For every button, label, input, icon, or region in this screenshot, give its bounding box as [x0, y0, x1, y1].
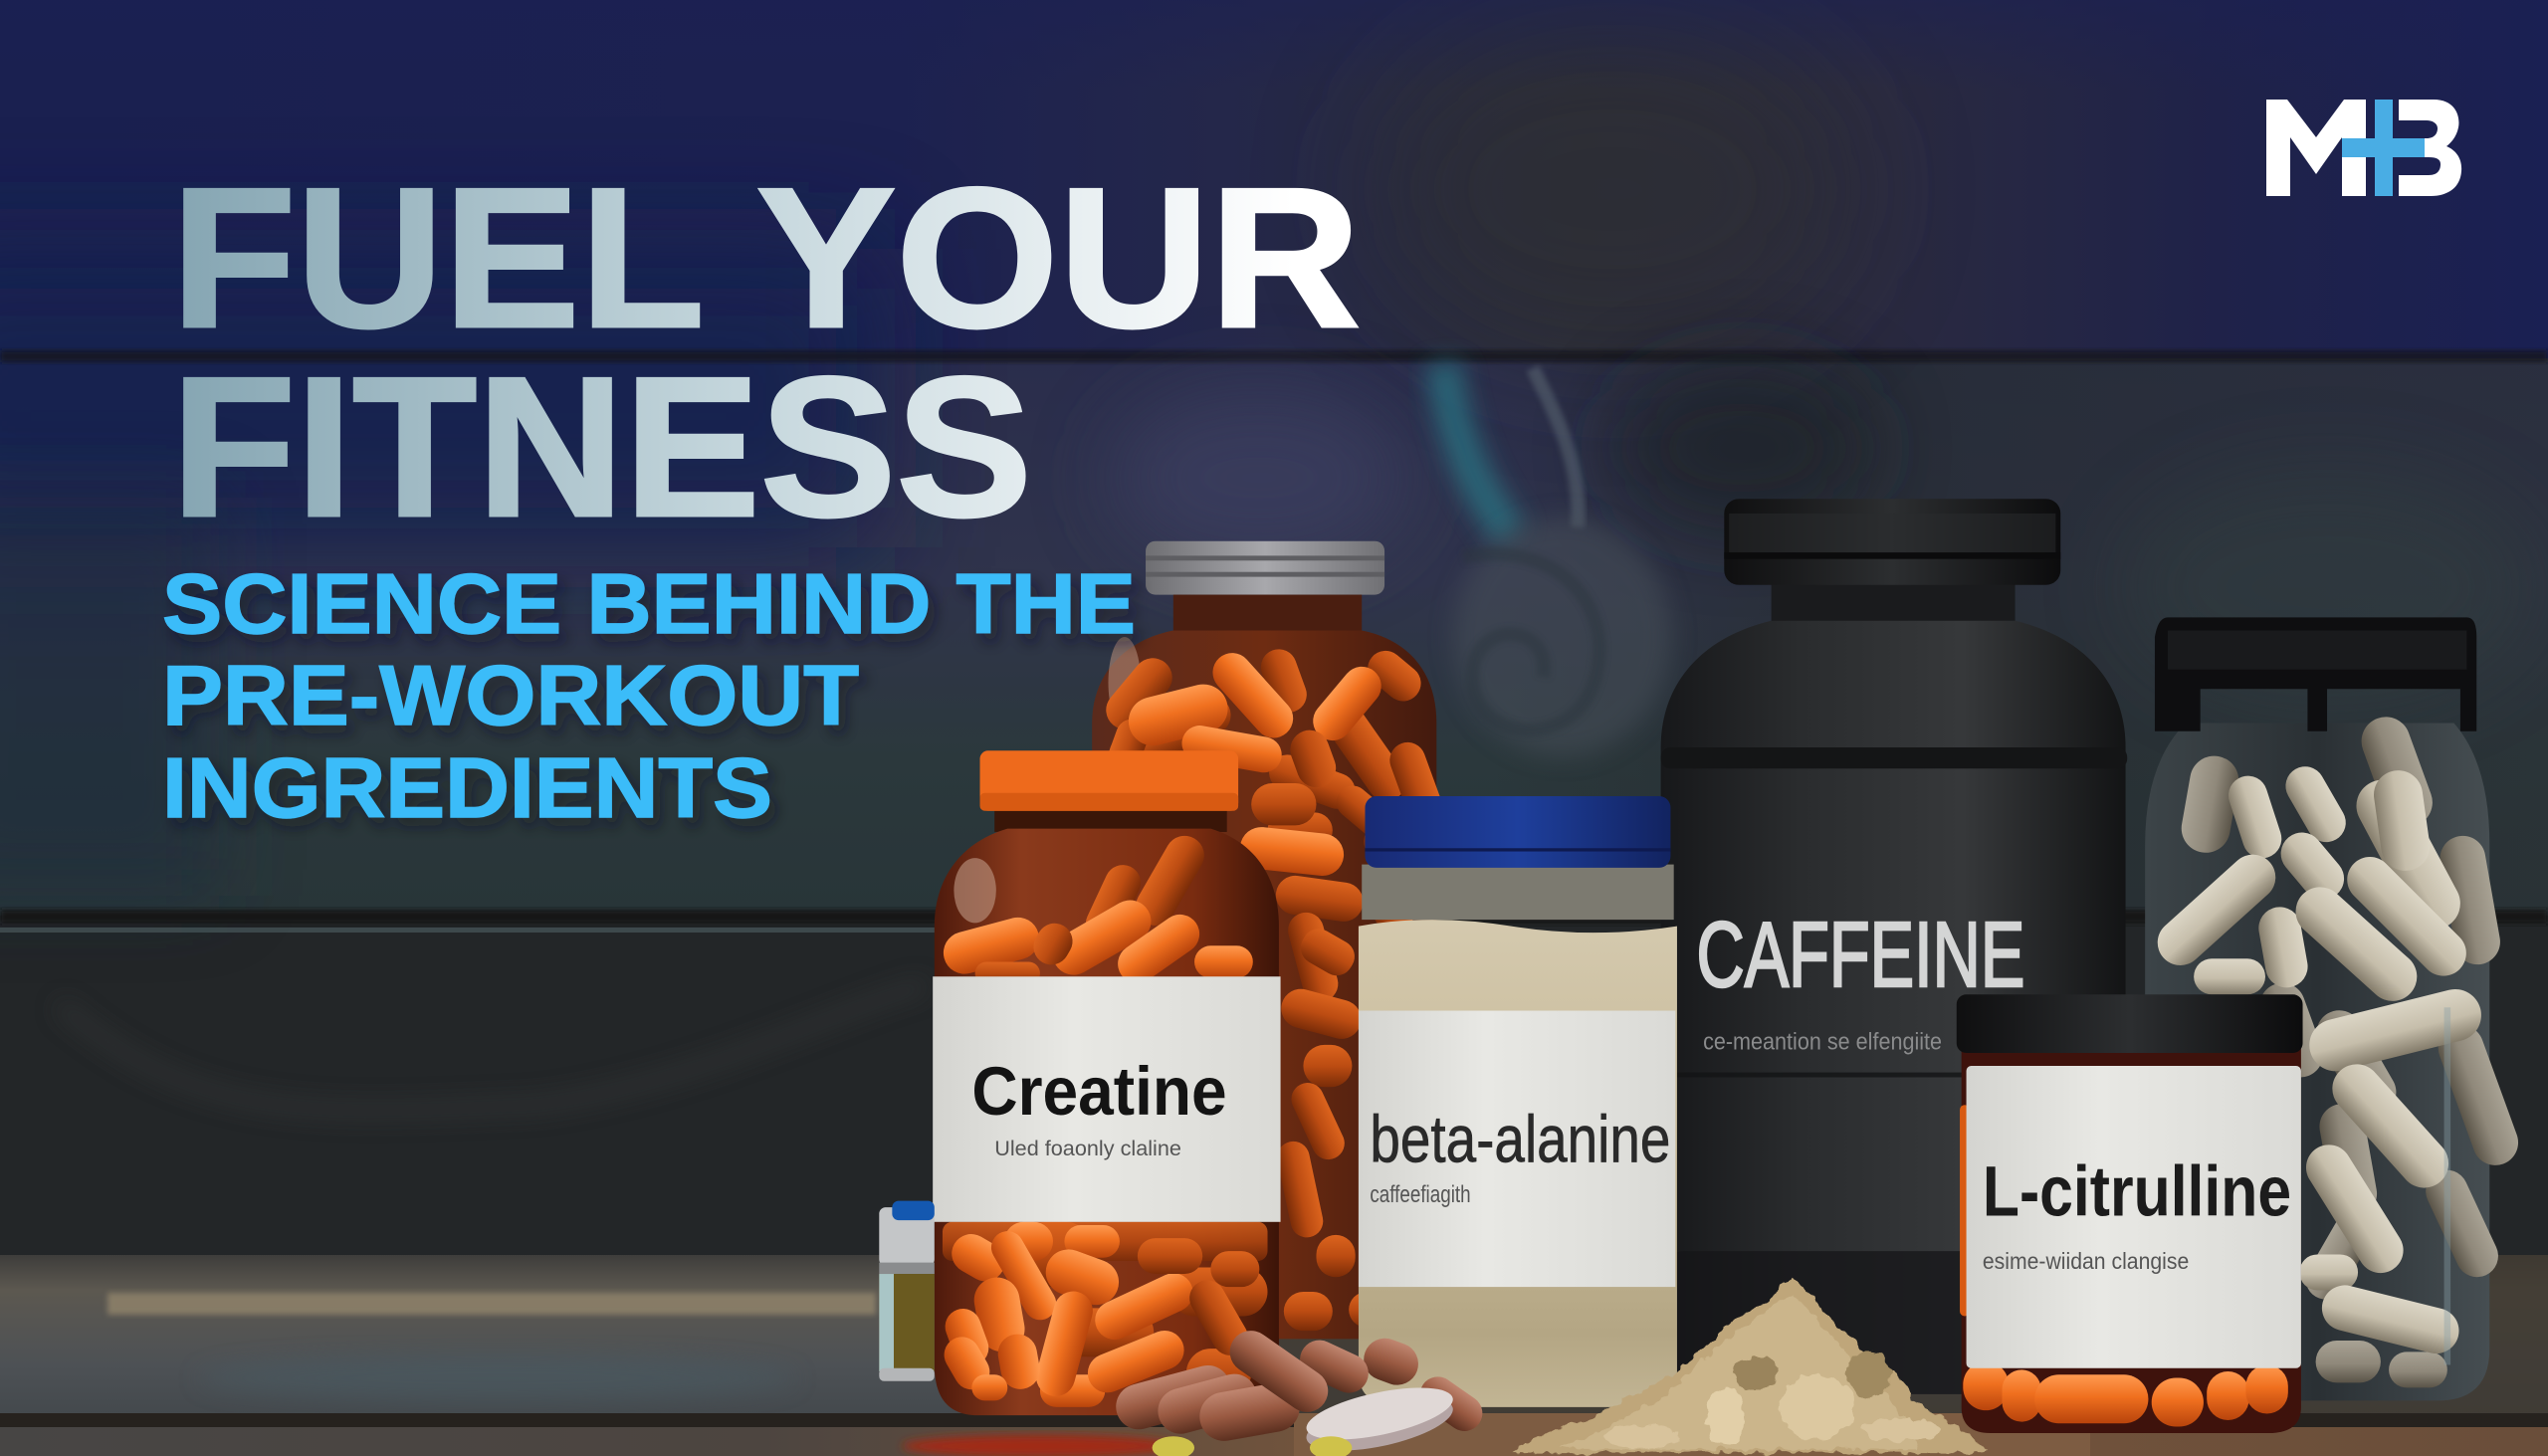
- subtitle: [162, 557, 1136, 836]
- jar highlight: [2444, 1007, 2450, 1364]
- capsules inside creatine bottle bottom: [938, 1222, 1268, 1407]
- red spice: [902, 1435, 1178, 1456]
- L-citrulline label: [1967, 1066, 2301, 1368]
- powder pile: [1511, 1277, 1989, 1453]
- beta-alanine text: beta-alanine: [1370, 1102, 1670, 1176]
- title: FUEL: [171, 147, 705, 369]
- beta-alanine label: [1359, 1011, 1675, 1287]
- title: YOUR: [756, 147, 1361, 369]
- creatine label: [933, 976, 1281, 1222]
- caffeine sub text: ce-meantion se elfengiite: [1703, 1029, 1942, 1056]
- bottle: caffeine black tub: [1661, 499, 2127, 1394]
- creatine text: Creatine: [971, 1053, 1227, 1130]
- cream capsules: [2148, 710, 2524, 1387]
- title: FITNESS: [171, 336, 1032, 558]
- logo: M+B: [2266, 100, 2461, 196]
- jar black lid: [1957, 994, 2303, 1053]
- subtitle: INGREDIENTS: [162, 741, 772, 836]
- capsules at jar bottom: [1963, 1361, 2288, 1427]
- subtitle: SCIENCE BEHIND THE: [162, 557, 1136, 652]
- product photo group (bottles, pills, powder): [879, 499, 2524, 1456]
- beta-alanine sub text: caffeefiagith: [1370, 1181, 1471, 1208]
- capsules inside creatine bottle top: [939, 829, 1253, 991]
- creatine orange cap: [980, 750, 1238, 811]
- L-citrulline text: L-citrulline: [1983, 1151, 2291, 1231]
- bottle: white capsule jar: [2145, 617, 2524, 1400]
- caffeine label text: CAFFEINE: [1697, 903, 2024, 1006]
- loose brown capsules and tablets: [1111, 1323, 1489, 1456]
- bottle: L-citrulline jar: [1957, 994, 2303, 1433]
- bottle: creatine amber bottle: [933, 750, 1281, 1415]
- L-citrulline sub text: esime-wiidan clangise: [1983, 1248, 2189, 1274]
- small tin: [879, 1201, 935, 1381]
- yellow pills: [1153, 1436, 1194, 1456]
- wooden table: [0, 1255, 2548, 1456]
- bottle: beta-alanine jar: [1359, 796, 1677, 1407]
- title: [171, 147, 1361, 558]
- black jar lid: [2155, 617, 2476, 731]
- capsules inside back bottle: [1098, 637, 1446, 1331]
- white tablet: [1302, 1377, 1457, 1456]
- creatine sub text: Uled foaonly claline: [994, 1138, 1181, 1160]
- bottle: back amber capsule bottle: [1092, 541, 1446, 1339]
- subtitle: PRE-WORKOUT: [162, 649, 859, 743]
